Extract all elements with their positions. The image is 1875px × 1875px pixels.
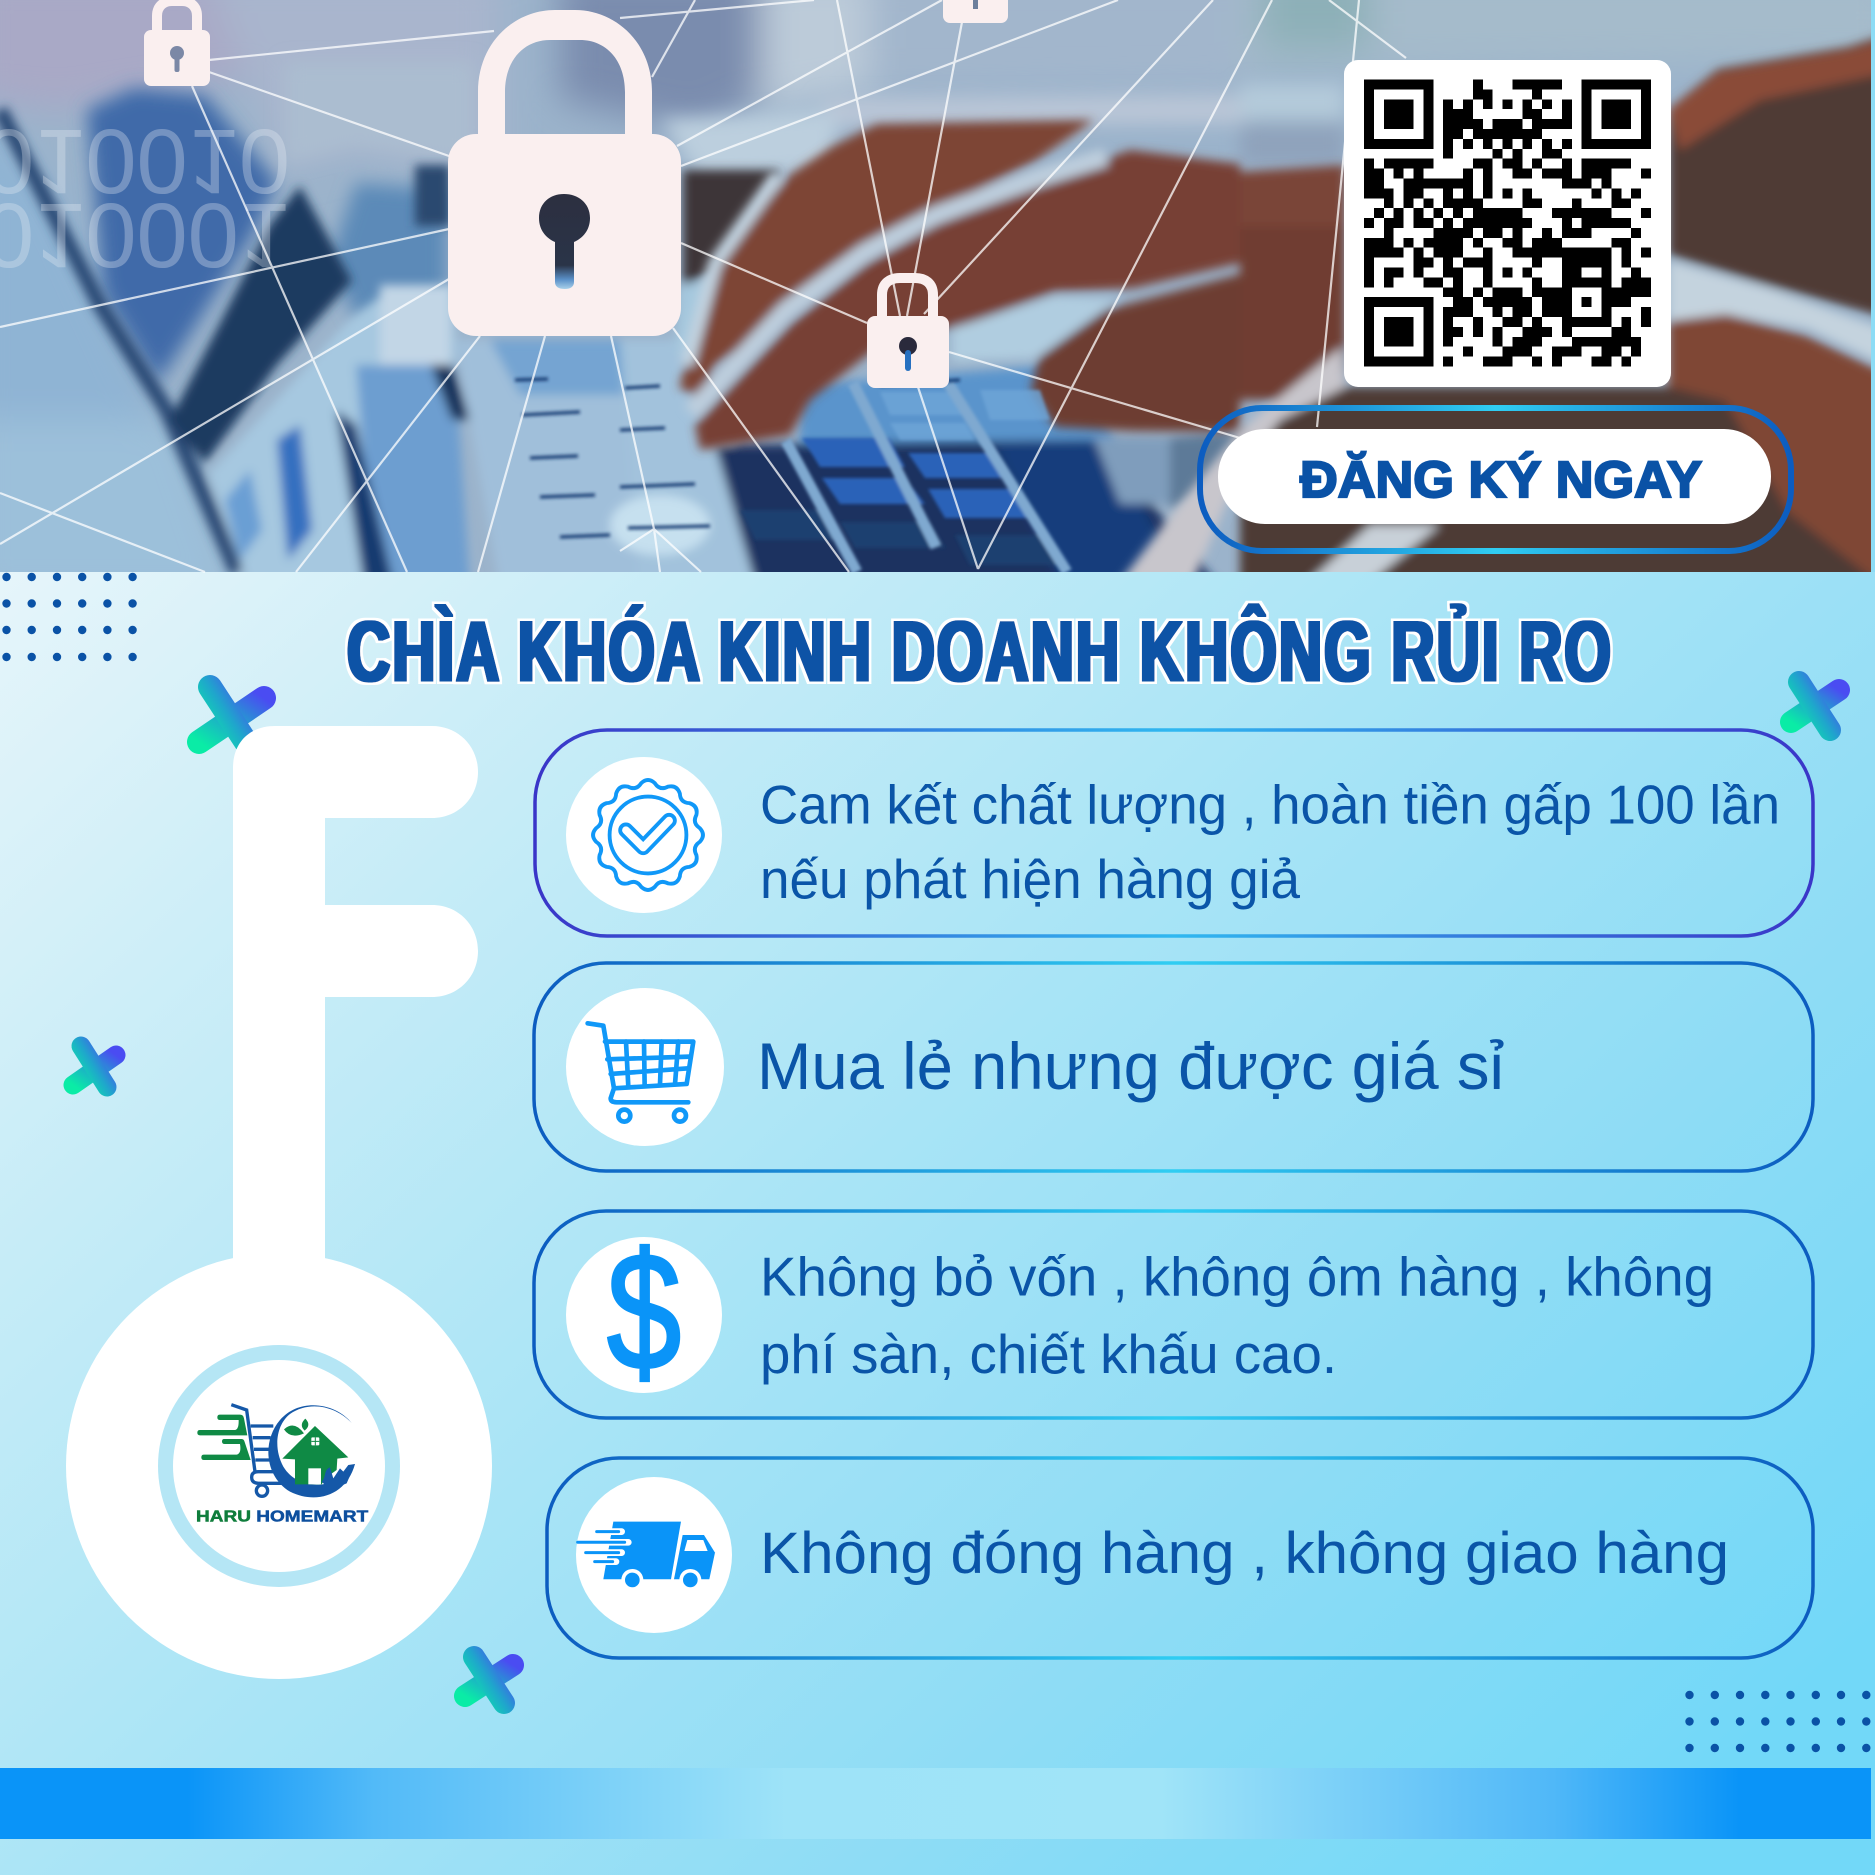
- bottom bar: [0, 1768, 1871, 1839]
- card 2: retail at wholesale price: [534, 963, 1813, 1171]
- icon: cross bottom: [465, 1657, 513, 1703]
- card 1: quality commitment: [535, 730, 1813, 936]
- button: register now: [1200, 408, 1791, 551]
- card 1: quality commitment: Cam kết chất lượng , hoàn tiền gấp 100 lần: [760, 774, 1780, 836]
- crescent: [268, 1405, 355, 1497]
- card 4: no packing, no delivery: Không đóng hàng , không giao hàng: [760, 1521, 1729, 1586]
- network lines: [0, 0, 1406, 572]
- key graphic: [66, 726, 492, 1679]
- decorative dots top left: [2, 573, 137, 661]
- hand: [322, 1464, 355, 1490]
- icon: large padlock: [448, 10, 681, 336]
- icon: small padlock centre: [867, 278, 949, 388]
- icon: shopping cart: [588, 1023, 693, 1122]
- icon: delivery truck: [578, 1522, 715, 1591]
- icon: small padlock top left: [144, 1, 210, 86]
- icon: dollar: $: [607, 1219, 681, 1405]
- icon: small padlock top right: [943, 0, 1008, 23]
- house: [282, 1426, 348, 1484]
- card 2: retail at wholesale price: Mua lẻ nhưng được giá sỉ: [757, 1029, 1504, 1103]
- icon: cross left: [73, 1046, 116, 1087]
- cart: [231, 1405, 283, 1496]
- card 3: no capital: Không bỏ vốn , không ôm hàng , không: [760, 1246, 1714, 1308]
- card 3: no capital: [534, 1211, 1813, 1418]
- speed bars: [197, 1415, 251, 1460]
- icon: cross top left: [199, 687, 264, 742]
- card 3: no capital: phí sàn, chiết khấu cao.: [760, 1323, 1337, 1385]
- icon: quality badge: [593, 780, 703, 890]
- card 1: quality commitment: nếu phát hiện hàng giả: [760, 848, 1300, 910]
- button: register now: ĐĂNG KÝ NGAY: [1300, 450, 1702, 508]
- logo: Haru Homemart: [196, 1405, 369, 1526]
- binary digits: [0, 129, 286, 268]
- icon: cross top right: [1791, 682, 1839, 730]
- QR code: [1364, 80, 1651, 366]
- QR code card: [1344, 60, 1671, 387]
- card 4: no packing, no delivery: [547, 1458, 1813, 1658]
- decorative dots bottom right: [1685, 1691, 1871, 1752]
- logo: Haru Homemart: HARU HOMEMART: [196, 1509, 369, 1526]
- header photo: hands typing on a laptop: [0, 0, 1875, 600]
